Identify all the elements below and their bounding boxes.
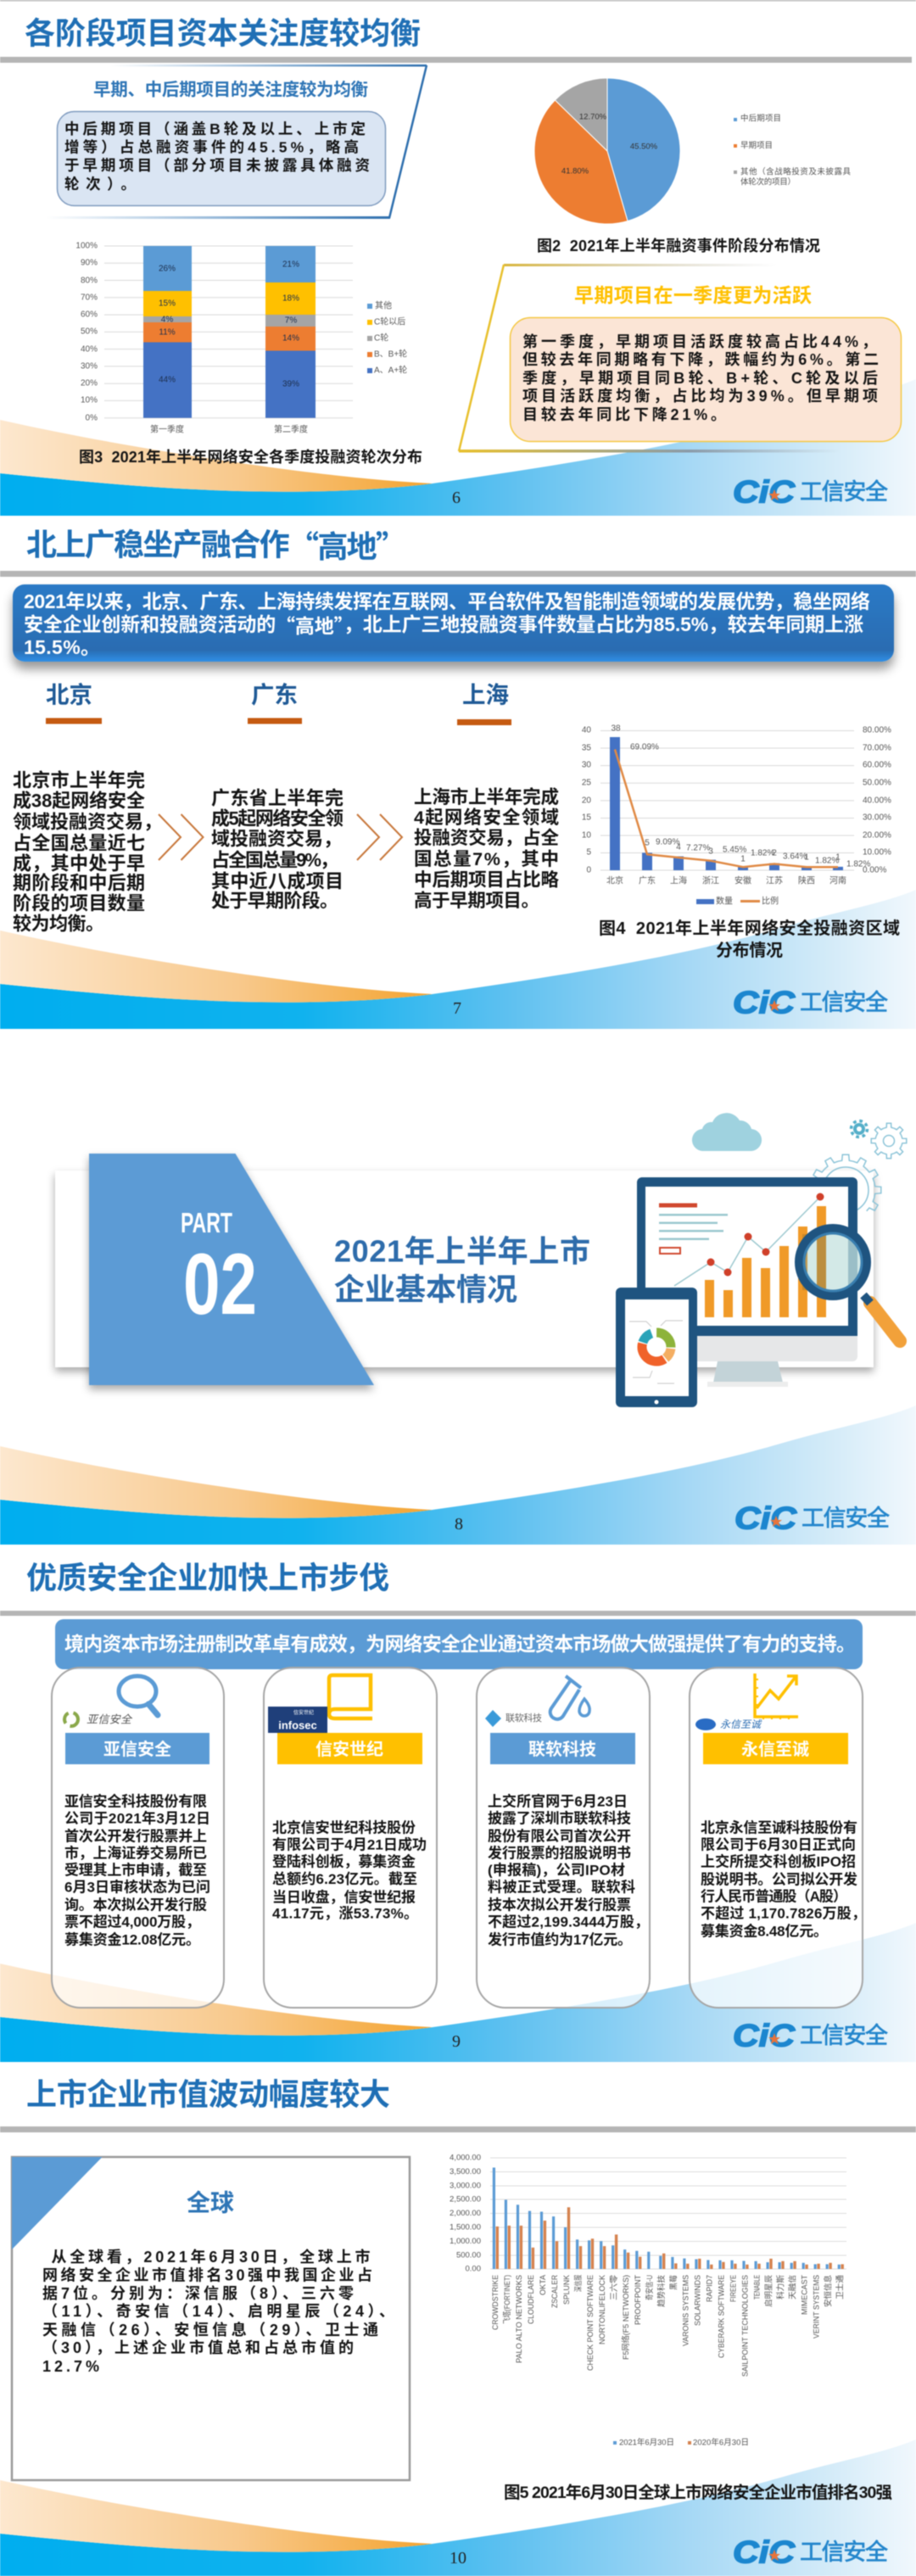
card text: 当日收盘，信安世纪报 — [272, 1888, 416, 1905]
box text — [64, 120, 370, 193]
combo chart: regional distribution: 5 — [586, 848, 591, 857]
stacked bar chart: rounds by quarter: 第二季度 — [274, 424, 308, 434]
stacked bar chart: rounds by quarter: 0% — [86, 414, 98, 422]
panel text: 从全球看，2021年6月30日，全球上市 — [51, 2248, 370, 2266]
panel text: 12.7% — [42, 2358, 99, 2375]
card text: 发行股票的招股说明书 — [488, 1844, 631, 1861]
stacked bar chart: rounds by quarter: 21% — [282, 260, 299, 270]
footer wave: slide 8 — [0, 1405, 916, 1545]
column: Shanghai: 上海 — [462, 682, 509, 707]
footer wave: slide 6: CiC — [733, 475, 796, 509]
combo chart: regional distribution: 10.00% — [863, 848, 891, 857]
summary band: 安全企业创新和投融资活动的“高地”，北上广三地投融资事件数量占比为85.5%，较去年同期上涨 — [24, 610, 863, 639]
bar chart: top 30 market cap: OKTA — [539, 2274, 548, 2295]
bar chart: top 30 market cap: CLOUDFLARE — [527, 2275, 536, 2324]
card: Integrity Tech — [690, 1668, 866, 2008]
combo chart: regional distribution: 20 — [582, 796, 591, 806]
card text: 不超过2,199.3444万股， — [488, 1914, 649, 1931]
panel text: 天融信（26）、安恒信息（29）、卫士通 — [42, 2321, 378, 2339]
footer wave: slide 8: CiC — [734, 1501, 797, 1535]
logo: AsiaInfo — [64, 1713, 133, 1726]
bar chart: top 30 market cap: CROWDSTRIKE — [491, 2275, 500, 2330]
combo chart: regional distribution: 1.82% — [815, 857, 839, 865]
card text: 限公司于6月30日正式向 — [701, 1837, 856, 1852]
caption: figure 4: 图4 2021年上半年网络安全投融资区域 — [599, 918, 900, 938]
combo chart: regional distribution: 0.00% — [863, 865, 886, 875]
card text: 发行市值约为17亿元。 — [488, 1931, 632, 1947]
card text: 亚信安全科技股份有限 — [64, 1793, 207, 1810]
box text: 项目活跃度均衡，占比均为39%。但早期项 — [522, 388, 878, 405]
card text: 受理其上市申请，截至 — [64, 1861, 207, 1878]
chart legend: 其他 — [375, 300, 392, 310]
bar chart: top 30 market cap: SOLARWINDS — [693, 2275, 702, 2326]
card text: 募集资金12.08亿元。 — [64, 1931, 200, 1947]
summary band — [55, 1619, 863, 1669]
card text: 6月3日审核状态为已问 — [64, 1878, 210, 1895]
caption: figure 4 — [599, 918, 900, 960]
box text: 中后期项目（涵盖B轮及以上、上市定 — [64, 120, 366, 137]
stacked bar chart: rounds by quarter: 26% — [159, 265, 176, 273]
combo chart: regional distribution: 80.00% — [863, 726, 891, 735]
chart legend: A、A+轮 — [374, 365, 407, 375]
column: Beijing: 领域投融资交易， — [13, 811, 162, 833]
combo chart: regional distribution: 40.00% — [863, 796, 891, 806]
text box — [511, 317, 901, 441]
card text: 首次公开发行股票并上 — [64, 1827, 207, 1844]
card: AsiaInfo — [52, 1668, 224, 2008]
combo chart: regional distribution: 4 — [676, 843, 681, 852]
slide 6: attention across stages — [0, 0, 916, 516]
stacked bar chart: rounds by quarter: 第一季度 — [150, 424, 184, 434]
card text: 技本次拟公开发行股票 — [488, 1897, 631, 1914]
stacked bar chart: rounds by quarter: 40% — [81, 344, 98, 355]
summary band: 2021年以来，北京、广东、上海持续发挥在互联网、平台软件及智能制造领域的发展优势，稳坐网络 — [24, 590, 870, 612]
chart legend — [367, 300, 407, 375]
combo chart: regional distribution: 安徽 — [734, 875, 751, 886]
footer wave: slide 6: 6 — [452, 489, 461, 507]
stacked bar chart: rounds by quarter: 11% — [159, 327, 176, 338]
card text: 股说明书。公司拟公开发 — [701, 1871, 857, 1888]
combo chart: regional distribution: 上海 — [670, 875, 687, 886]
panel: early vs mid-late — [47, 64, 427, 219]
stacked bar chart: rounds by quarter: 15% — [159, 299, 176, 309]
combo chart: regional distribution: 20.00% — [863, 831, 891, 840]
combo chart: regional distribution: 1.82% — [751, 848, 774, 858]
logo: Leagsoft — [485, 1710, 542, 1727]
part badge: 02 — [183, 1236, 257, 1333]
name bar — [65, 1733, 209, 1764]
combo chart: regional distribution: 50.00% — [863, 779, 891, 787]
card text: 披露了深圳市联软科技 — [488, 1810, 631, 1827]
combo chart: regional distribution: 陕西 — [798, 875, 815, 886]
combo chart: regional distribution: 2 — [772, 848, 777, 858]
card text: 总额约6.23亿元。截至 — [272, 1871, 417, 1887]
panel heading: 早期、中后期项目的关注度较为均衡 — [93, 80, 368, 100]
combo chart: regional distribution: 江苏 — [766, 875, 783, 886]
combo chart: regional distribution: 3 — [708, 847, 713, 857]
bar chart: top 30 market cap: 启明星辰 — [763, 2275, 774, 2307]
column: Beijing: 占全国总量近七 — [13, 833, 145, 853]
bar chart: top 30 market cap: 卫士通 — [835, 2275, 846, 2299]
chart legend: 比例 — [762, 896, 779, 906]
panel text: （30），上述企业市值总和占总市值的 — [42, 2339, 354, 2356]
pie legend: 早期项目 — [740, 141, 773, 151]
chart legend — [696, 896, 779, 906]
bar chart: top 30 market cap — [450, 2153, 846, 2448]
card text: 41.17元，涨53.73%。 — [272, 1905, 418, 1922]
footer wave: slide 10: 10 — [450, 2549, 466, 2568]
stacked bar chart: rounds by quarter: 80% — [81, 277, 98, 285]
summary band: 15.5%。 — [24, 636, 100, 658]
footer wave: slide 9: 工信安全 — [800, 2023, 888, 2048]
bar chart: top 30 market cap: MIMECAST — [801, 2275, 810, 2315]
icon: cloud — [692, 1113, 762, 1151]
name bar — [490, 1733, 635, 1764]
pie legend: 中后期项目 — [740, 114, 781, 124]
pie legend: 其他（含战略投资及未披露具 — [740, 166, 851, 176]
card text: 上交所提交科创板IPO招 — [701, 1852, 856, 1869]
combo chart: regional distribution: 40 — [582, 726, 591, 735]
card text: 募集资金8.48亿元。 — [701, 1922, 828, 1939]
caption: figure 3: 图3 2021年上半年网络安全各季度投融资轮次分布 — [79, 448, 422, 466]
column: Beijing: 成38起网络安全 — [13, 791, 145, 811]
logo: AsiaInfo: 亚信安全 — [87, 1713, 133, 1725]
footer wave: slide 9: 9 — [452, 2032, 461, 2051]
card — [55, 1171, 874, 1367]
combo chart: regional distribution: 浙江 — [702, 875, 719, 886]
card: Integrity Tech: 永信至诚 — [741, 1740, 809, 1759]
box text: 增等）占总融资事件的45.5%，略高 — [64, 139, 359, 156]
icon: tablet — [616, 1288, 697, 1407]
column: Beijing — [13, 682, 162, 935]
column: Guangdong: 处于早期阶段。 — [211, 891, 338, 911]
combo chart: regional distribution: 9.09% — [656, 838, 679, 847]
stacked bar chart: rounds by quarter: 4% — [161, 316, 173, 324]
column: Guangdong: 广东 — [251, 682, 298, 707]
combo chart: regional distribution: 10 — [582, 831, 591, 840]
bar chart: top 30 market cap: PALO ALTO NETWORKS — [515, 2275, 524, 2363]
combo chart: regional distribution: 5.45% — [723, 845, 746, 855]
icon: monitor — [637, 1177, 857, 1387]
card text: 市，上海证券交易所已 — [64, 1844, 207, 1861]
name bar — [277, 1733, 422, 1764]
caption: figure 4: 分布情况 — [716, 941, 783, 960]
text box — [58, 112, 385, 205]
footer wave: slide 8: 工信安全 — [802, 1506, 890, 1531]
card: Leagsoft: 联软科技 — [528, 1740, 596, 1759]
icon: magnifier — [119, 1676, 158, 1715]
bar chart: top 30 market cap: NORTONLIFELOCK — [598, 2274, 607, 2344]
logo: Infosec: 信安世纪 — [293, 1709, 314, 1716]
footer wave: slide 10 — [0, 2439, 916, 2576]
title: 各阶段项目资本关注度较均衡 — [25, 15, 421, 51]
bar chart: top 30 market cap: 3,000.00 — [450, 2182, 481, 2190]
column: Shanghai: 投融资交易，占全 — [414, 827, 559, 848]
column: Beijing: 期阶段和中后期 — [13, 872, 145, 894]
column: Beijing: 较为均衡。 — [13, 913, 104, 935]
slide 10: market cap — [0, 2062, 916, 2576]
bar chart: top 30 market cap: VARONIS SYSTEMS — [681, 2275, 690, 2346]
slide 8: part 02 divider — [0, 1113, 916, 1545]
chart legend: C轮以后 — [374, 316, 405, 327]
combo chart: regional distribution: 69.09% — [630, 743, 659, 752]
stacked bar chart: rounds by quarter: 10% — [81, 395, 98, 405]
card text: 上交所官网于6月23日 — [488, 1793, 628, 1810]
chart legend — [613, 2438, 749, 2448]
combo chart: regional distribution: 1 — [804, 853, 809, 862]
bar chart: top 30 market cap: 飞塔(FORTINET) — [502, 2275, 512, 2324]
footer wave: slide 6 — [0, 379, 916, 516]
pie chart: stage distribution — [534, 78, 851, 224]
card text — [272, 1819, 427, 1922]
bar chart: top 30 market cap: 天融信 — [788, 2275, 798, 2299]
icon: test tube — [550, 1676, 589, 1719]
bar chart: top 30 market cap: ZSCALER — [550, 2275, 560, 2308]
bar chart: top 30 market cap: TENABLE — [753, 2275, 762, 2299]
bar chart: top 30 market cap: 趋势科技 — [656, 2275, 667, 2307]
combo chart: regional distribution: 0 — [586, 865, 591, 875]
bar chart: top 30 market cap: 500.00 — [456, 2251, 481, 2260]
column: Guangdong: 成5起网络安全领 — [211, 807, 344, 830]
bar chart: top 30 market cap: 奇安信-U — [645, 2275, 655, 2300]
icon: magnifier — [799, 1228, 900, 1341]
pie chart: stage distribution: 12.70% — [579, 112, 607, 122]
name bar — [703, 1733, 848, 1764]
column: Guangdong: 域投融资交易， — [211, 828, 342, 850]
part badge: PART — [181, 1207, 232, 1238]
combo chart: regional distribution: 70.00% — [863, 743, 891, 753]
bar chart: top 30 market cap: 深信服 — [573, 2275, 584, 2292]
column: Shanghai: 上海市上半年完成 — [414, 786, 559, 807]
caption: figure 5: 图5 2021年6月30日全球上市网络安全企业市值排名30强 — [504, 2483, 892, 2502]
bar chart: top 30 market cap: 2,500.00 — [450, 2195, 481, 2204]
title: 上市企业市值波动幅度较大 — [26, 2076, 390, 2112]
card text: 北京信安世纪科技股份 — [272, 1819, 416, 1836]
column: Beijing: 阶段的项目数量 — [13, 892, 145, 914]
chart legend: 2020年6月30日 — [693, 2438, 749, 2448]
combo chart: regional distribution: 15 — [582, 813, 591, 823]
box text — [522, 332, 879, 423]
panel text — [42, 2248, 394, 2375]
stacked bar chart: rounds by quarter: 20% — [81, 378, 98, 388]
stacked bar chart: rounds by quarter: 14% — [282, 334, 299, 343]
logo: Infosec — [268, 1707, 327, 1733]
stacked bar chart: rounds by quarter: 90% — [81, 258, 98, 268]
bar chart: top 30 market cap: 3,500.00 — [450, 2167, 481, 2176]
section heading: 2021年上半年上市 — [334, 1233, 590, 1269]
logo: Integrity Tech: 永信至诚 — [720, 1718, 762, 1730]
footer wave: slide 9 — [0, 1923, 916, 2062]
panel heading: 全球 — [187, 2190, 234, 2216]
card text: 不超过 1,170.7826万股， — [701, 1905, 866, 1922]
logo: Infosec: infosec — [278, 1718, 317, 1732]
box text: 于早期项目（部分项目未披露具体融资 — [64, 157, 370, 174]
stacked bar chart: rounds by quarter: 70% — [81, 293, 98, 302]
card text: 有限公司于4月21日成功 — [272, 1836, 427, 1852]
stacked bar chart: rounds by quarter: 44% — [159, 375, 176, 385]
card text — [488, 1793, 649, 1947]
card text: (申报稿)，公司IPO材 — [488, 1861, 625, 1878]
combo chart: regional distribution: 广东 — [639, 875, 656, 886]
stacked bar chart: rounds by quarter: 100% — [75, 241, 98, 251]
icon: book — [329, 1675, 372, 1718]
card text — [701, 1819, 866, 1939]
icon: gears — [810, 1121, 907, 1215]
stacked bar chart: rounds by quarter: 7% — [285, 316, 297, 326]
column: Shanghai: 4起网络安全领域 — [414, 807, 559, 828]
stacked bar chart: rounds by quarter: 50% — [81, 327, 98, 336]
combo chart: regional distribution: 河南 — [829, 875, 846, 886]
title: 北上广稳坐产融合作“高地” — [26, 522, 406, 567]
bar chart: top 30 market cap: CYBERARK SOFTWARE — [717, 2275, 726, 2358]
panel text: 据7位。分别为：深信服（8）、三六零 — [42, 2284, 354, 2302]
column: Guangdong — [211, 682, 344, 911]
combo chart: regional distribution: 38 — [611, 724, 621, 733]
arrow: chevrons 1 — [159, 814, 204, 860]
box text: 轮次）。 — [64, 176, 136, 193]
chart legend: C轮 — [374, 332, 388, 343]
footer wave: slide 8: 8 — [455, 1515, 463, 1534]
bar chart: top 30 market cap: 1,000.00 — [450, 2237, 481, 2246]
stacked bar chart: rounds by quarter: 60% — [81, 310, 98, 319]
card text: 料被正式受理。联软科 — [488, 1878, 635, 1895]
column: Guangdong: 占全国总量9%， — [211, 850, 338, 870]
panel: global — [12, 2157, 410, 2480]
footer wave: slide 6: 工信安全 — [800, 479, 888, 505]
footer wave: slide 7 — [0, 890, 916, 1029]
combo chart: regional distribution: 7.27% — [686, 843, 710, 853]
column: Beijing: 成，其中处于早 — [13, 853, 145, 874]
stacked bar chart: rounds by quarter: 39% — [282, 380, 299, 388]
stacked bar chart: rounds by quarter: 30% — [81, 361, 98, 372]
column: Guangdong: 其中近八成项目 — [211, 870, 344, 892]
footer wave: slide 7: CiC — [733, 986, 796, 1020]
panel text: 网络安全企业市值排名30强中我国企业占 — [42, 2266, 372, 2283]
column: Shanghai: 国总量7%，其中 — [414, 849, 559, 869]
pie legend — [734, 114, 851, 187]
combo chart: regional distribution: 30.00% — [863, 813, 891, 823]
footer wave: slide 9: CiC — [733, 2019, 796, 2053]
combo chart: regional distribution: 35 — [582, 743, 591, 753]
caption: figure 2: 图2 2021年上半年融资事件阶段分布情况 — [537, 237, 820, 254]
combo chart: regional distribution: 北京 — [606, 875, 623, 886]
section heading — [334, 1233, 590, 1306]
summary band — [13, 584, 894, 662]
section heading: 企业基本情况 — [334, 1272, 517, 1306]
box text: 目较去年同比下降21%。 — [522, 405, 726, 423]
bar chart: top 30 market cap: SAILPOINT TECHNOLOGIES — [740, 2275, 750, 2377]
bar chart: top 30 market cap: 安恒信息 — [824, 2275, 834, 2307]
card text — [64, 1793, 210, 1947]
bar chart: top 30 market cap: 0.00 — [465, 2265, 481, 2273]
combo chart: regional distribution: 1.82% — [846, 860, 870, 869]
box text: 第一季度，早期项目活跃度较高占比44%， — [522, 332, 877, 350]
column: Shanghai: 中后期项目占比略 — [414, 870, 559, 891]
panel text: （11）、奇安信（14）、启明星辰（24）、 — [42, 2303, 394, 2320]
column: Shanghai — [414, 682, 559, 911]
card: Leagsoft — [477, 1668, 650, 2008]
logo: Integrity Tech — [695, 1718, 762, 1730]
chart legend: 2021年6月30日 — [619, 2438, 674, 2448]
column: Beijing: 北京 — [46, 682, 92, 707]
combo chart: regional distribution: 3.64% — [783, 852, 807, 862]
stacked bar chart: rounds by quarter — [75, 241, 407, 434]
bar chart: top 30 market cap: 三六零 — [609, 2274, 619, 2300]
column: Shanghai: 高于早期项目。 — [414, 890, 539, 911]
footer wave: slide 10: 工信安全 — [800, 2540, 888, 2565]
card text: 公司于2021年3月12日 — [64, 1810, 210, 1827]
card text: 票不超过4,000万股， — [64, 1914, 200, 1931]
pie chart: stage distribution: 41.80% — [561, 166, 589, 176]
footer wave: slide 10: CiC — [733, 2534, 796, 2570]
footer wave: slide 7: 7 — [453, 999, 461, 1018]
panel: early projects in Q1 — [459, 264, 901, 453]
card: Infosec: 信安世纪 — [316, 1740, 383, 1759]
bar chart: top 30 market cap: 1,500.00 — [450, 2222, 481, 2232]
footer wave: slide 7: 工信安全 — [800, 990, 888, 1015]
bar chart: top 30 market cap: FIREEYE — [729, 2275, 738, 2302]
pie chart: stage distribution: 45.50% — [630, 142, 658, 151]
icon: data analytics illustration — [616, 1113, 907, 1407]
card text: 北京永信至诚科技股份有 — [701, 1819, 857, 1836]
bar chart: top 30 market cap: PROOFPOINT — [634, 2275, 643, 2325]
card: AsiaInfo: 亚信安全 — [103, 1739, 171, 1759]
combo chart: regional distribution: 1 — [835, 853, 841, 862]
bar chart: top 30 market cap: RAPID7 — [705, 2275, 714, 2302]
chart legend: B、B+轮 — [374, 348, 407, 360]
column: Beijing: 北京市上半年完 — [13, 770, 145, 791]
bar chart: top 30 market cap: F5网络(F5 NETWORKS) — [621, 2275, 631, 2360]
card text: 股份有限公司首次公开 — [488, 1827, 631, 1844]
combo chart: regional distribution: 5 — [645, 838, 650, 848]
bar chart: top 30 market cap: CHECK POINT SOFTWARE — [586, 2275, 595, 2371]
slide 9: companies going public — [0, 1545, 916, 2062]
part badge — [89, 1154, 374, 1385]
card text: 行人民币普通股（A股） — [701, 1888, 847, 1905]
title: 优质安全企业加快上市步伐 — [26, 1561, 389, 1595]
summary band: 境内资本市场注册制改革卓有成效，为网络安全企业通过资本市场做大做强提供了有力的支持。 — [64, 1633, 856, 1655]
stacked bar chart: rounds by quarter: 18% — [282, 293, 299, 304]
bar chart: top 30 market cap: 科力斯 — [775, 2275, 785, 2299]
combo chart: regional distribution: 25 — [582, 779, 591, 787]
bar chart: top 30 market cap: 2,000.00 — [450, 2209, 481, 2218]
bar chart: top 30 market cap: 4,000.00 — [450, 2153, 481, 2163]
chart legend: 数量 — [716, 896, 733, 906]
arrow: chevrons 2 — [357, 814, 402, 860]
card text: 登陆科创板，募集资金 — [272, 1852, 416, 1869]
bar chart: top 30 market cap: VERINT SYSTEMS — [813, 2275, 822, 2339]
slide 7: Beijing Shanghai Guangdong — [0, 516, 916, 1029]
combo chart: regional distribution — [582, 724, 891, 906]
card text: 询。本次拟公开发行股 — [64, 1897, 207, 1914]
box text: 但较去年同期略有下降，跌幅约为6%。第二 — [522, 350, 879, 368]
bar chart: top 30 market cap: 黑莓 — [668, 2275, 679, 2290]
bar chart: top 30 market cap: SPLUNK — [562, 2274, 572, 2305]
combo chart: regional distribution: 30 — [582, 760, 591, 770]
panel heading: 早期项目在一季度更为活跃 — [574, 284, 812, 306]
icon: growth chart — [755, 1674, 798, 1719]
box text: 季度，早期项目同B轮、B+轮、C轮及以后 — [522, 370, 878, 387]
combo chart: regional distribution: 1 — [740, 855, 746, 863]
column: Guangdong: 广东省上半年完 — [211, 787, 344, 809]
combo chart: regional distribution: 60.00% — [863, 760, 891, 770]
pie legend: 体轮次的项目） — [740, 176, 796, 187]
card: Infosec — [264, 1668, 437, 2008]
logo: Leagsoft: 联软科技 — [505, 1712, 542, 1724]
